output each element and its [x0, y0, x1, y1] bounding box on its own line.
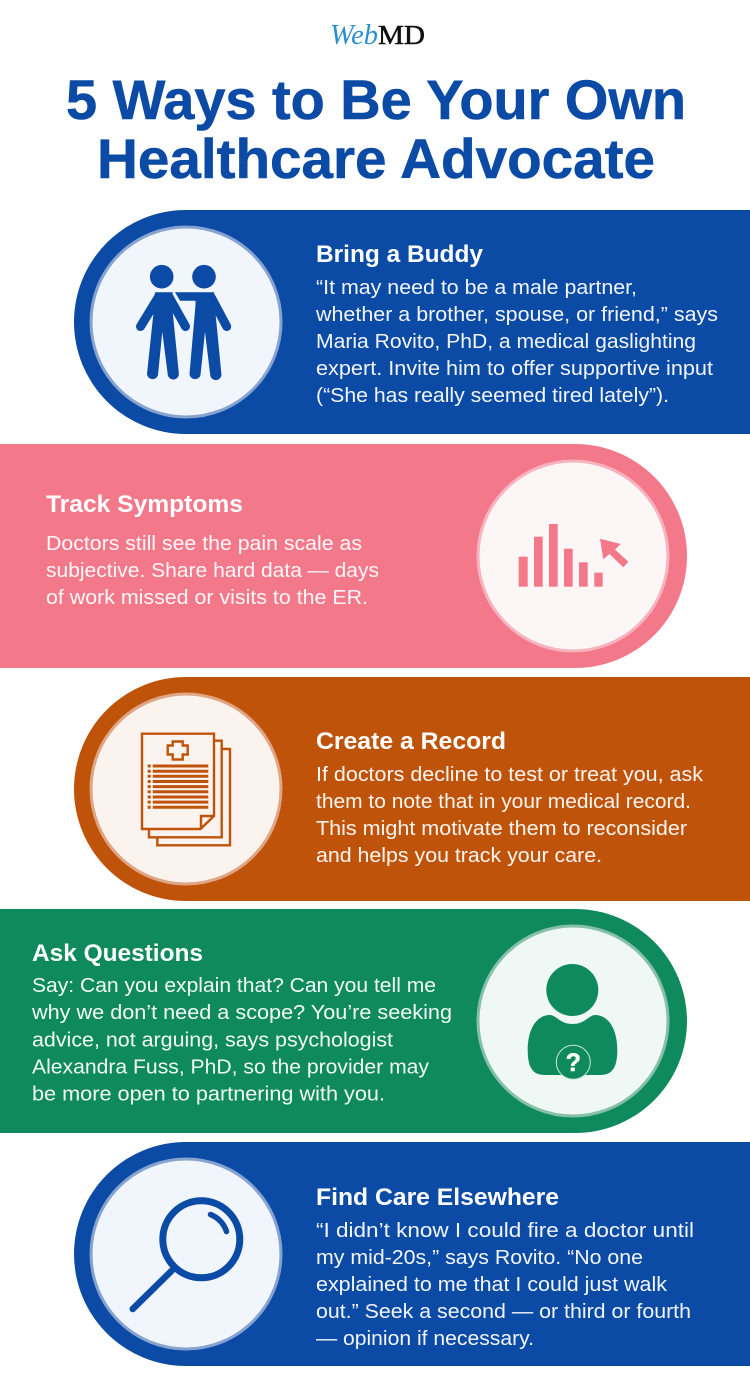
- text: Ask Questions body: advice, not arguing, says psychologist: [32, 1030, 393, 1052]
- panel: Ask Questions: [0, 909, 687, 1133]
- text: Find Care Elsewhere body: my mid-20s,” says Rovito. “No one: [316, 1247, 643, 1269]
- text: Ask Questions body: Alexandra Fuss, PhD, so the provider may: [32, 1056, 429, 1078]
- icon: two people: [140, 265, 227, 380]
- text: Create a Record body: This might motivate them to reconsider: [316, 818, 687, 840]
- text: Find Care Elsewhere body: “I didn’t know I could fire a doctor until: [316, 1220, 694, 1242]
- text: Bring a Buddy body: expert. Invite him to offer supportive input: [316, 358, 713, 380]
- text: Ask Questions body: Say: Can you explain that? Can you tell me: [32, 975, 436, 997]
- text: Bring a Buddy body: (“She has really seemed tired lately”).: [316, 385, 669, 407]
- title: Healthcare Advocate: [97, 127, 655, 190]
- heading: Bring a Buddy: Bring a Buddy: [316, 241, 484, 268]
- logo: WebMD: Web: [330, 20, 378, 51]
- icon: bar chart with arrow: [519, 524, 628, 587]
- panel: Create a Record: [74, 677, 750, 901]
- logo: WebMD: MD: [378, 20, 425, 50]
- heading: Track Symptoms: Track Symptoms: [46, 491, 243, 518]
- text: Ask Questions body: why we don’t need a scope? You’re seeking: [31, 1002, 452, 1024]
- icon: magnifying glass: [133, 1201, 240, 1309]
- text: Bring a Buddy body: Maria Rovito, PhD, a medical gaslighting: [316, 331, 696, 353]
- title: 5 Ways to Be Your Own: [66, 68, 686, 131]
- title: [66, 68, 686, 190]
- heading: Create a Record: Create a Record: [316, 728, 506, 755]
- text: Find Care Elsewhere body: explained to me that I could just walk: [316, 1274, 668, 1296]
- text: Track Symptoms body: Doctors still see the pain scale as: [46, 533, 362, 555]
- text: Track Symptoms body: [46, 533, 379, 609]
- text: Find Care Elsewhere body: out.” Seek a second — or third or fourth: [316, 1301, 691, 1323]
- heading: Find Care Elsewhere: Find Care Elsewhere: [316, 1184, 559, 1211]
- text: Bring a Buddy body: “It may need to be a male partner,: [316, 277, 637, 299]
- text: Bring a Buddy body: [315, 277, 718, 407]
- icon: medical documents: [142, 734, 230, 845]
- panel: Find Care Elsewhere: [74, 1142, 750, 1366]
- heading: Ask Questions: Ask Questions: [32, 940, 203, 967]
- text: Find Care Elsewhere body: [316, 1220, 694, 1350]
- text: Create a Record body: and helps you track your care.: [316, 845, 602, 867]
- text: Create a Record body: If doctors decline to test or treat you, ask: [316, 764, 704, 786]
- text: Bring a Buddy body: whether a brother, spouse, or friend,” says: [315, 304, 718, 326]
- text: Track Symptoms body: subjective. Share hard data — days: [46, 560, 379, 582]
- icon: person with question mark: [528, 964, 617, 1079]
- text: Track Symptoms body: of work missed or visits to the ER.: [46, 587, 368, 609]
- text: Find Care Elsewhere body: — opinion if necessary.: [316, 1328, 534, 1350]
- text: Ask Questions body: [31, 975, 452, 1106]
- panel: Track Symptoms: [0, 444, 687, 668]
- text: Create a Record body: them to note that in your medical record.: [316, 791, 691, 813]
- logo: WebMD: [330, 20, 425, 51]
- text: Ask Questions body: be more open to partnering with you.: [32, 1084, 385, 1106]
- text: Create a Record body: [316, 764, 704, 867]
- icon: person with question mark: ?: [566, 1049, 581, 1077]
- panel: Bring a Buddy: [74, 210, 750, 434]
